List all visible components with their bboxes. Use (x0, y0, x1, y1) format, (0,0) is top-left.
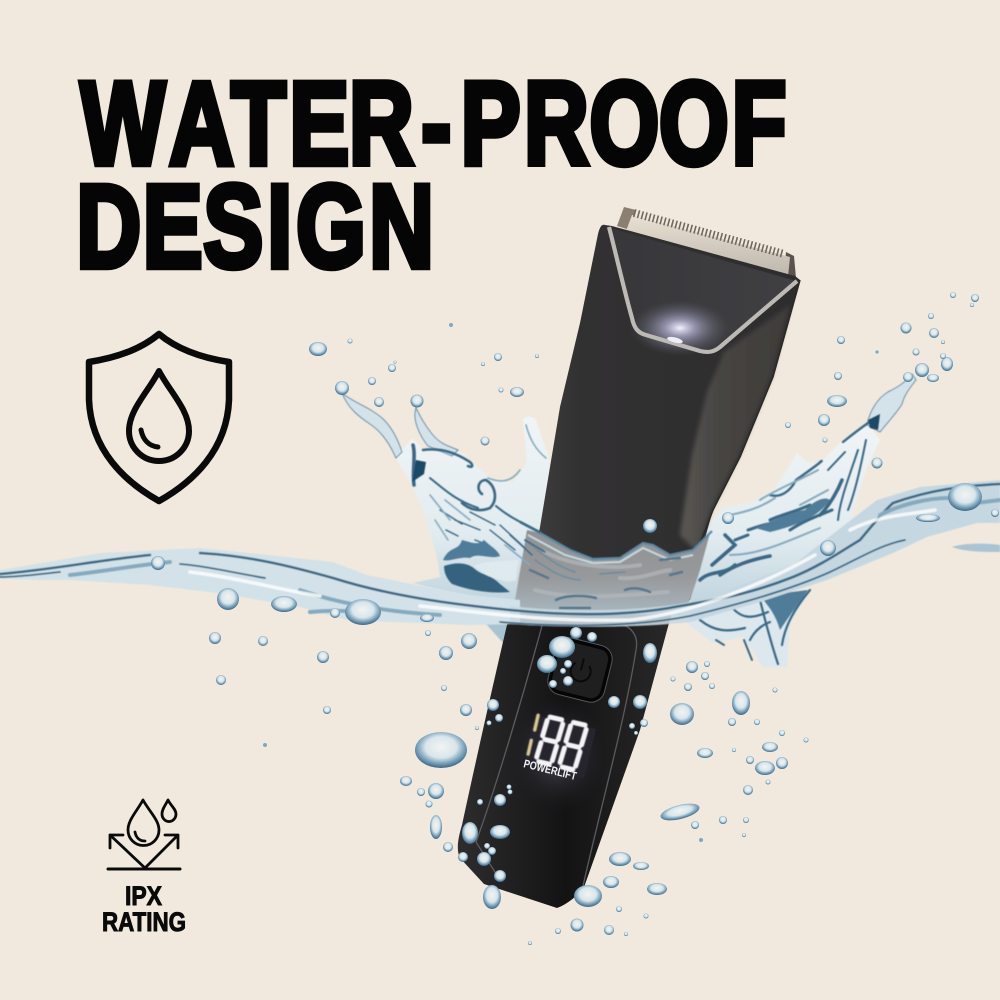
waterline secondary currents (70, 498, 1000, 615)
indicator light (667, 336, 683, 344)
brand label on display: POWERLIFT (522, 758, 578, 783)
icon and label: IPX rating (102, 800, 186, 937)
title: DESIGN (76, 161, 434, 293)
title: WATER-PROOF (80, 58, 786, 190)
left tendrils (342, 393, 458, 458)
main water band right (680, 480, 1000, 622)
submerged dark streaks (530, 558, 682, 608)
waterline highlights (190, 510, 935, 620)
underwater splash left (478, 615, 520, 645)
waterline on trimmer (520, 522, 712, 559)
droplets above waterline right (722, 292, 999, 556)
right water crown (690, 423, 880, 610)
display digits (527, 714, 587, 770)
trimmer: lower body (458, 612, 672, 908)
blade carriage left (617, 207, 636, 230)
main water band left (0, 548, 520, 625)
trimmer: submerged section (513, 522, 712, 615)
droplets above waterline left (309, 323, 657, 533)
body right facet (680, 305, 790, 552)
blade carriage right (784, 252, 796, 278)
main water band center (510, 602, 690, 627)
droplets around lower body (400, 630, 667, 945)
power button (545, 635, 615, 705)
trimmer: head panel with silver trim (609, 227, 797, 356)
display glow (508, 697, 608, 813)
icon: shield with water drop (89, 334, 229, 501)
splash detail strokes right (700, 414, 880, 664)
display panel (524, 715, 596, 778)
submerged gray water (513, 530, 710, 615)
splash behind trimmer (342, 374, 916, 667)
droplets on left waterline (151, 556, 434, 747)
droplets to the right of lower body (659, 661, 808, 842)
blade guard (626, 215, 790, 277)
silver trim (609, 227, 797, 352)
water streak far right (952, 544, 1000, 552)
underwater splash right (680, 590, 810, 667)
waterline dark secondary (0, 540, 905, 625)
body edge (697, 280, 800, 552)
droplets on button and display area (537, 627, 657, 735)
water splash details (0, 414, 1000, 664)
trimmer: blade (617, 207, 796, 278)
blade teeth (634, 213, 784, 254)
submerged lighter streaks (535, 552, 670, 596)
right crown spout (867, 374, 916, 432)
label: IPX RATING: RATING (102, 907, 186, 937)
trimmer: upper body (525, 225, 800, 600)
LED glow (630, 300, 730, 356)
left water crown (395, 417, 550, 610)
icon: droplets and arrows (108, 800, 180, 869)
lower body shell (458, 612, 672, 908)
panel lines (476, 622, 637, 886)
waterline dark current (0, 484, 1000, 614)
splash detail strokes left (412, 425, 546, 593)
label: IPX RATING (102, 881, 186, 937)
head panel (610, 228, 796, 352)
water droplets (151, 292, 999, 945)
title (76, 58, 786, 293)
label: IPX RATING: IPX (125, 881, 162, 911)
